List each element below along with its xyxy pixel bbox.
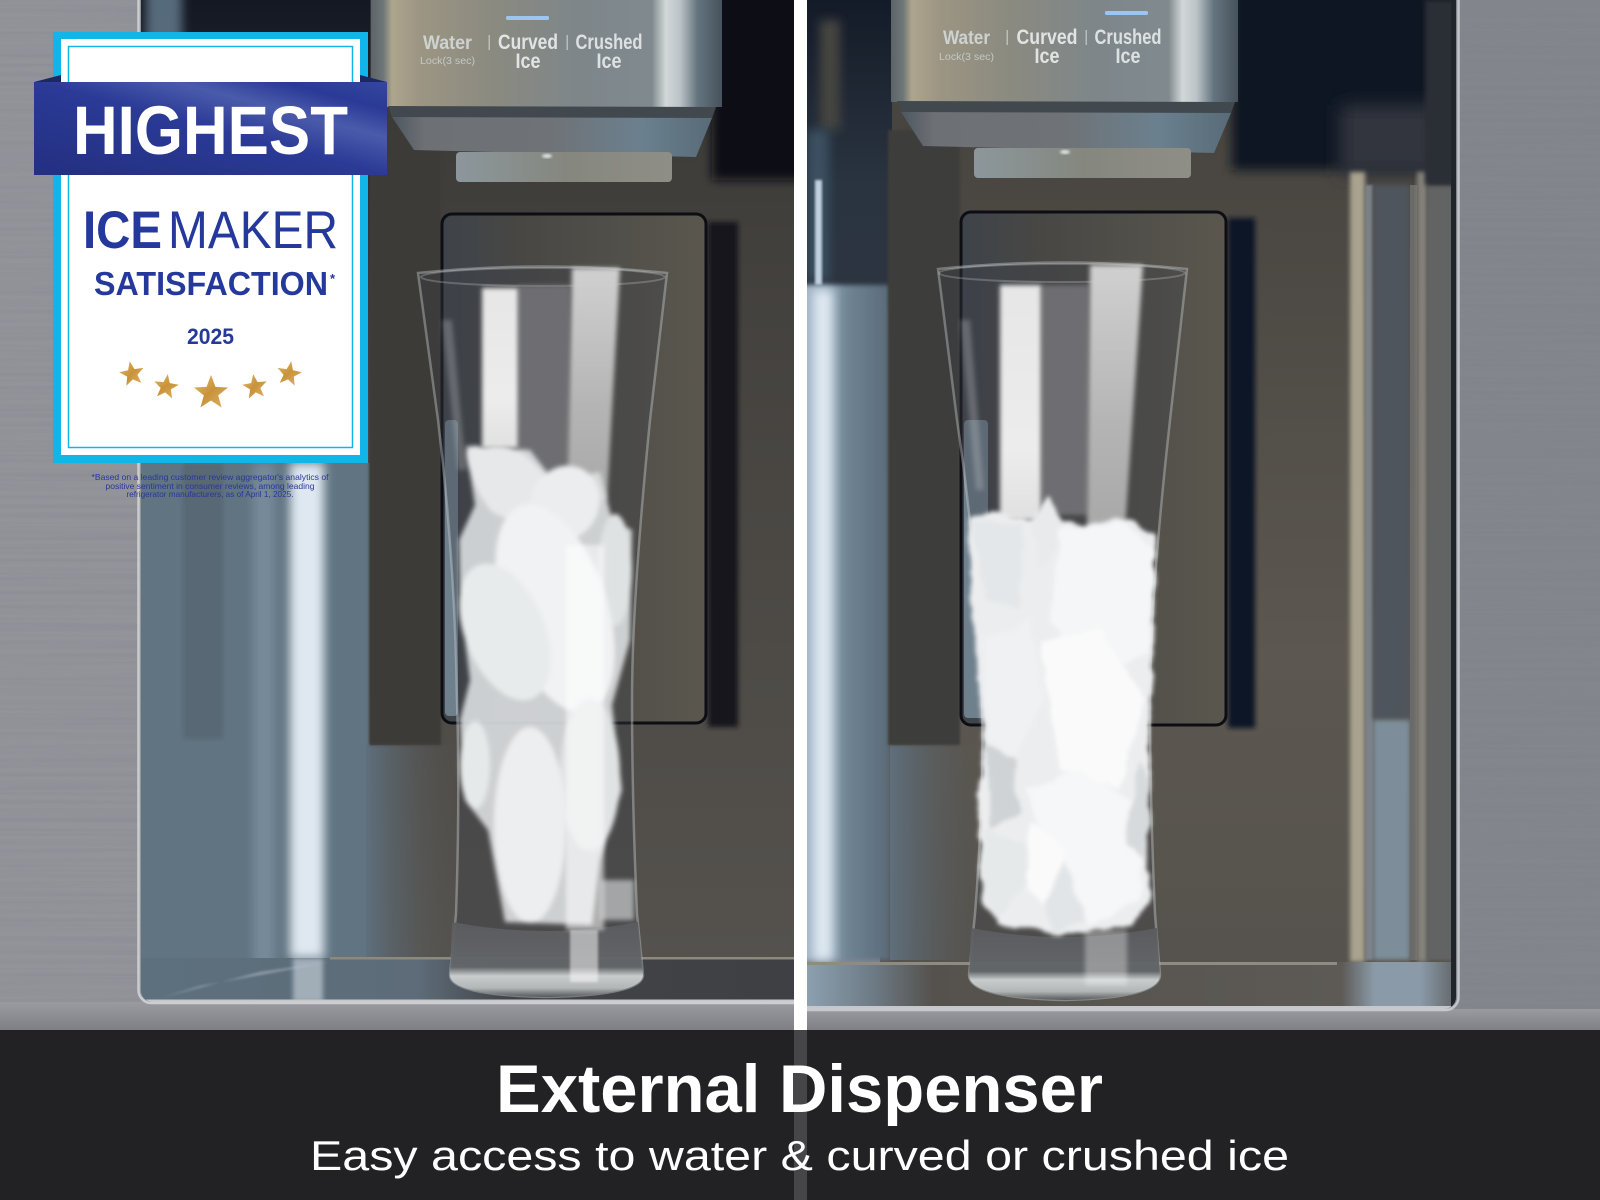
badge footnote — [92, 472, 329, 499]
label: curved ice — [498, 34, 557, 68]
label: crushed ice — [1095, 28, 1160, 63]
glass base — [969, 928, 1160, 1000]
badge word: satisfaction: SATISFACTION — [94, 265, 328, 302]
label: water: Water — [943, 28, 991, 49]
label: water: Water — [423, 33, 473, 54]
label: crushed ice: Ice — [1116, 45, 1140, 68]
caption heading: External Dispenser — [496, 1051, 1103, 1127]
ribbon — [34, 82, 387, 175]
five gold stars — [118, 359, 303, 408]
label: curved ice: Ice — [1034, 45, 1060, 68]
white divider between photos — [794, 0, 807, 1030]
label: lock: Lock(3 sec) — [420, 56, 475, 67]
crushed ice pieces — [969, 497, 1155, 935]
label: crushed ice: Ice — [596, 50, 622, 73]
label: crushed ice: Crushed — [1094, 26, 1162, 49]
badge word: ice maker: ICE — [83, 201, 162, 260]
lower rim, left — [0, 1002, 794, 1030]
dispenser control head, left — [371, 0, 722, 182]
badge word: highest: HIGHEST — [73, 92, 348, 169]
label: crushed ice: Crushed — [576, 31, 642, 54]
brushed steel door, right — [807, 0, 1600, 1030]
caption subheading: Easy access to water & curved or crushed ice — [310, 1132, 1289, 1179]
label: lock: Lock(3 sec) — [939, 52, 994, 63]
caption bar — [0, 1030, 1600, 1200]
indicator light — [1105, 11, 1148, 15]
glass, right — [938, 262, 1187, 1000]
ribbon folds — [34, 75, 387, 82]
badge footnote: *Based on a leading customer review aggregator's analytics of — [92, 472, 329, 482]
label: curved ice — [1017, 28, 1076, 63]
label: curved ice: Ice — [516, 50, 540, 73]
curved ice pieces — [441, 446, 638, 925]
glass base — [450, 922, 643, 997]
badge footnote: positive sentiment in consumer reviews, among leading — [106, 481, 315, 491]
badge word: ice maker: MAKER — [168, 201, 338, 260]
badge footnote: refrigerator manufacturers, as of April 1, 2025. — [126, 489, 294, 499]
dispenser control head, right — [891, 0, 1238, 178]
panel: right photo, crushed ice — [760, 0, 1600, 1030]
brushed steel door, left — [0, 0, 150, 1002]
label: crushed ice — [576, 34, 642, 68]
recess edge highlight, left — [138, 0, 838, 1003]
dispenser recess, left — [141, 0, 812, 1003]
badge year: 2025 — [187, 324, 234, 349]
reflections on side wall — [1350, 172, 1365, 962]
panel: left photo, curved ice — [0, 0, 838, 1030]
badge word: ice maker — [83, 201, 338, 260]
paddle, right — [961, 212, 1226, 725]
paddle, left — [442, 214, 706, 723]
dispenser recess, right — [795, 0, 1462, 1009]
lower rim, right — [807, 1009, 1600, 1020]
award badge — [34, 32, 387, 463]
badge word: satisfaction: * — [330, 271, 336, 286]
indicator light — [506, 16, 549, 20]
label: curved ice: Curved — [1016, 26, 1078, 49]
label: curved ice: Curved — [498, 31, 558, 54]
recess edge highlight, right — [760, 0, 1458, 1010]
glass, left — [418, 266, 667, 997]
